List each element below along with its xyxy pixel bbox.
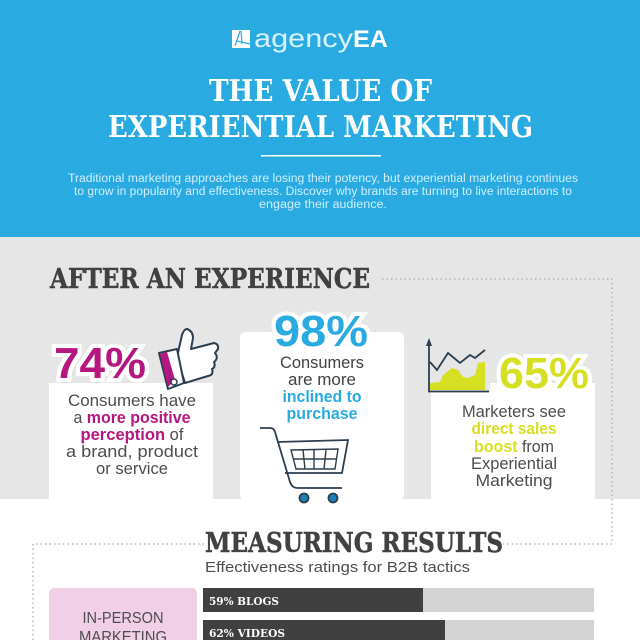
in-person marketing box bbox=[49, 588, 197, 640]
65% stat: 65% bbox=[499, 349, 589, 398]
74% description bbox=[66, 392, 198, 478]
heading: after an experience: AFTER AN EXPERIENCE bbox=[49, 264, 370, 295]
98% description: purchase bbox=[286, 405, 358, 423]
logo bbox=[232, 23, 388, 53]
title: EXPERIENTIAL MARKETING bbox=[108, 110, 533, 145]
intro text bbox=[68, 173, 578, 211]
intro text: engage their audience. bbox=[259, 199, 387, 211]
65% description: direct sales bbox=[472, 420, 556, 438]
74% stat: 74% bbox=[54, 339, 146, 388]
74% description: a more positive bbox=[74, 409, 190, 427]
bar: videos 62% bbox=[203, 620, 594, 640]
intro text: to grow in popularity and effectiveness. Discover why brands are turning to live interactions to bbox=[74, 186, 572, 198]
65% description: Experiential bbox=[471, 455, 557, 473]
header panel bbox=[0, 0, 640, 237]
card: 98% bbox=[240, 307, 404, 502]
logo: agency bbox=[254, 23, 353, 53]
bar: blogs 59% bbox=[203, 588, 594, 612]
98% description: are more bbox=[288, 371, 356, 389]
card: 65% bbox=[426, 338, 595, 500]
65% description: Marketing bbox=[476, 472, 552, 490]
title: THE VALUE OF bbox=[209, 74, 432, 109]
panel: measuring results bbox=[49, 528, 594, 640]
subheading: Effectiveness ratings for B2B tactics bbox=[205, 559, 470, 576]
bar: blogs 59%: 59% BLOGS bbox=[209, 594, 279, 608]
98% stat: 98% bbox=[274, 307, 368, 356]
65% description: Marketers see bbox=[462, 403, 566, 421]
icon: shopping cart bbox=[260, 428, 348, 502]
title bbox=[108, 74, 533, 145]
logo: EA bbox=[353, 26, 388, 53]
icon: line chart bbox=[426, 338, 489, 392]
74% description: or service bbox=[96, 460, 168, 478]
in-person marketing box: IN-PERSON bbox=[82, 610, 164, 627]
card: 74% bbox=[49, 329, 218, 500]
bar: videos 62%: 62% VIDEOS bbox=[209, 626, 285, 640]
65% description: boost from bbox=[474, 438, 554, 456]
icon: thumbs up bbox=[159, 329, 218, 389]
intro text: Traditional marketing approaches are losing their potency, but experiential marketing continues bbox=[68, 173, 578, 185]
65% description bbox=[462, 403, 566, 490]
98% description: inclined to bbox=[282, 388, 362, 406]
heading: measuring results: MEASURING RESULTS bbox=[205, 528, 503, 559]
74% description: Consumers have bbox=[68, 392, 196, 410]
98% description bbox=[280, 354, 364, 423]
74% description: a brand, product bbox=[66, 443, 198, 461]
98% description: Consumers bbox=[280, 354, 364, 372]
74% description: perception of bbox=[80, 426, 184, 444]
